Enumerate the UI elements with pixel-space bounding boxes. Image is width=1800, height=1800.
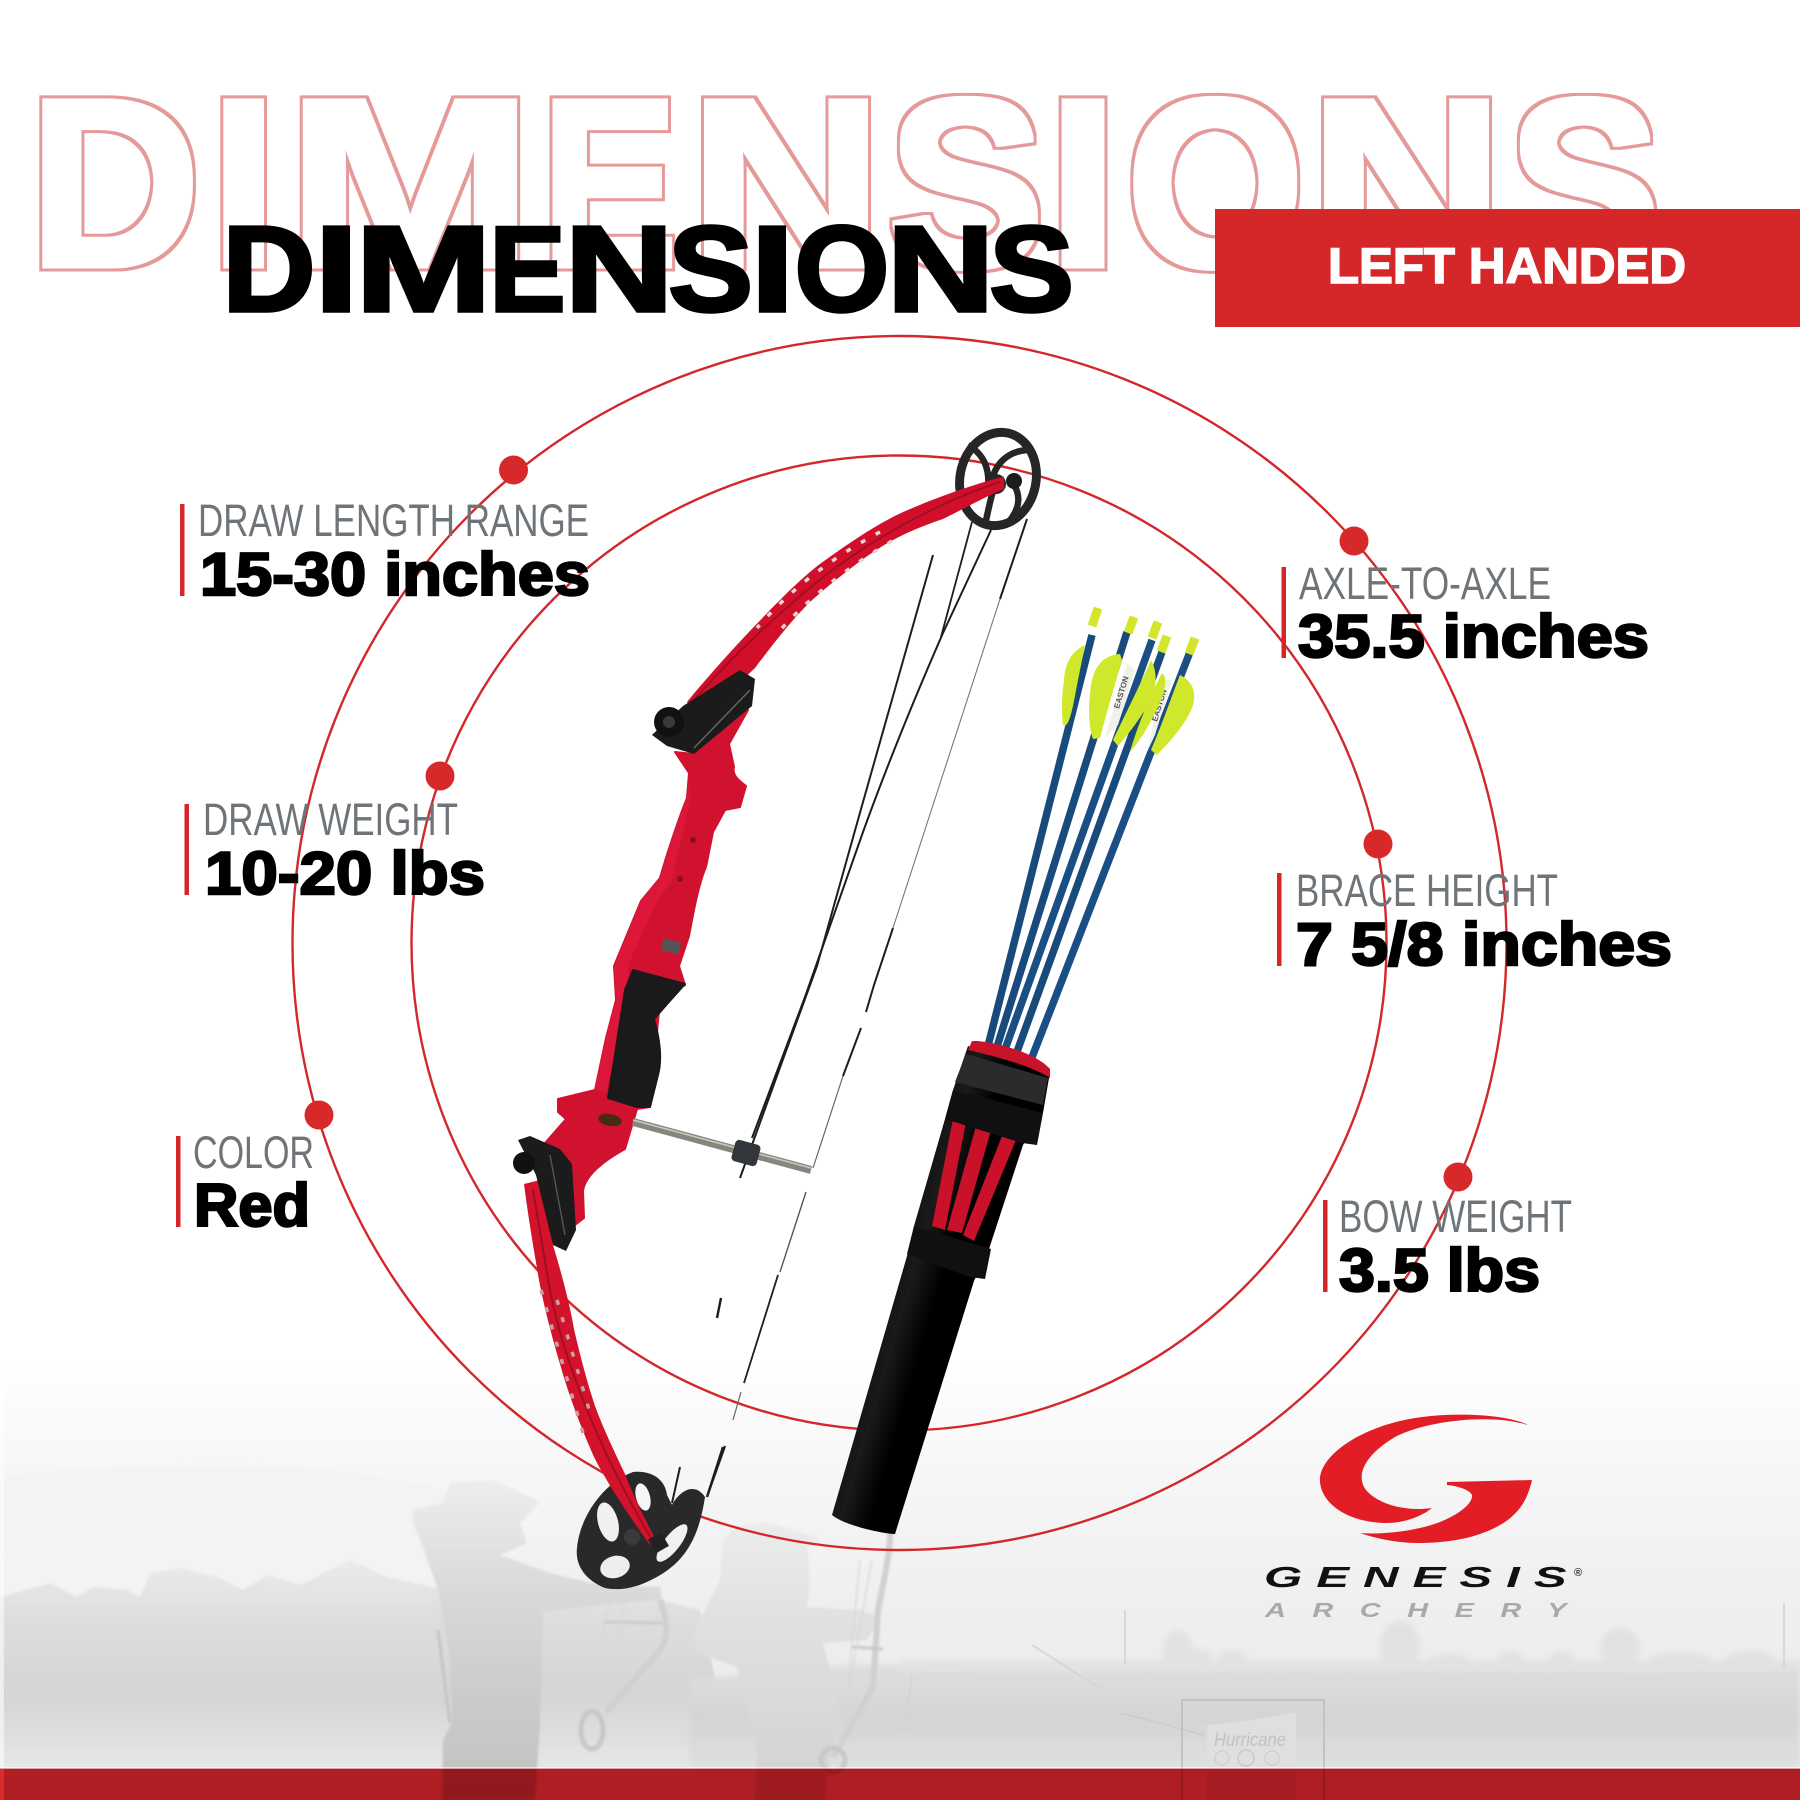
lower cam <box>577 1472 705 1589</box>
title: M <box>355 201 492 337</box>
callout: bow weight: 3.5 lbs <box>1339 1237 1540 1304</box>
poles and stray arrows <box>904 1603 1784 1735</box>
callout: axle-to-axle: 35.5 inches <box>1298 603 1649 670</box>
banner: left handed: LEFT HANDED <box>1328 238 1686 294</box>
easton vanes: EASTON <box>1112 675 1131 710</box>
outlined background title: S <box>1508 49 1661 317</box>
logo mark <box>1320 1415 1532 1543</box>
upper cam wheel <box>951 425 1045 533</box>
callout: draw weight <box>184 794 485 907</box>
title: S <box>668 201 753 337</box>
easton vanes <box>1105 663 1172 752</box>
callout: bow weight: BOW WEIGHT <box>1339 1191 1572 1242</box>
callout: draw length range <box>180 495 590 608</box>
title: N <box>887 201 994 337</box>
title: E <box>489 201 566 337</box>
callout: brace height <box>1277 865 1672 978</box>
callout: color: COLOR <box>193 1127 314 1178</box>
wordmark genesis: GENESIS <box>1264 1560 1567 1593</box>
title: I <box>751 201 794 337</box>
outlined background title: O <box>1126 49 1304 317</box>
target frame <box>1182 1700 1324 1800</box>
title: S <box>989 201 1074 337</box>
compound bow <box>513 425 1045 1589</box>
arrows <box>987 608 1195 1065</box>
callout: draw length range: 15-30 inches <box>200 541 590 608</box>
outlined background title: M <box>285 49 535 317</box>
lower limb <box>524 1180 669 1553</box>
concentric target rings with callout dots <box>292 336 1506 1550</box>
arrow nocks <box>1092 608 1195 654</box>
callout: brace height: BRACE HEIGHT <box>1296 865 1558 916</box>
ghost archer one <box>413 1480 666 1800</box>
field and horizon right <box>690 1664 1800 1768</box>
easton vanes: EASTON <box>1150 688 1169 723</box>
registered mark: ® <box>1574 1567 1582 1579</box>
quiver red rim <box>968 1041 1050 1078</box>
distant trees right <box>900 1621 1800 1670</box>
arrow shafts <box>987 632 1190 1065</box>
outlined background title: D <box>29 49 200 317</box>
lower limb pocket <box>513 1136 576 1251</box>
callout: draw length range: DRAW LENGTH RANGE <box>198 495 589 546</box>
fletching <box>1062 645 1194 755</box>
title: I <box>315 201 358 337</box>
target frame: Hurricane <box>1214 1730 1286 1751</box>
callout: color <box>176 1127 314 1239</box>
quiver straps <box>907 1090 1043 1279</box>
outlined background title: N <box>688 49 884 317</box>
outlined background title: I <box>209 49 278 317</box>
stabilizer rod <box>633 1120 811 1170</box>
outlined background title: S <box>888 49 1045 317</box>
tree line left <box>0 1560 720 1768</box>
background: misty archery field photo <box>0 1360 1800 1800</box>
grip <box>608 970 685 1107</box>
quiver <box>832 1041 1050 1534</box>
footer band <box>0 1767 1800 1800</box>
upper limb <box>687 476 1004 720</box>
callout: bow weight <box>1323 1191 1572 1304</box>
callout: draw weight: DRAW WEIGHT <box>203 794 458 845</box>
quiver lower tube and body <box>832 1046 1050 1534</box>
logo: genesis archery <box>1264 1415 1582 1622</box>
quiver upper collar <box>955 1054 1048 1105</box>
riser <box>545 710 748 1225</box>
callout: draw weight: 10-20 lbs <box>205 840 485 907</box>
callout: color: Red <box>194 1172 310 1239</box>
bow string and cables <box>672 519 1027 1503</box>
outlined background title: E <box>541 49 678 317</box>
distant hill <box>0 1466 520 1600</box>
title: O <box>794 201 889 337</box>
callout: axle-to-axle <box>1282 558 1649 670</box>
banner: left handed <box>1215 209 1800 327</box>
quiver red webbing <box>932 1119 1016 1241</box>
callout: brace height: 7 5/8 inches <box>1296 911 1672 978</box>
outlined background title: N <box>1308 49 1505 317</box>
callout: axle-to-axle: AXLE-TO-AXLE <box>1299 558 1551 609</box>
title: D <box>222 201 316 337</box>
outlined background title: I <box>1046 49 1120 317</box>
wordmark archery: ARCHERY <box>1264 1599 1569 1622</box>
upper limb pocket <box>652 670 755 754</box>
title: N <box>565 201 673 337</box>
ghost archer two <box>693 1522 890 1800</box>
